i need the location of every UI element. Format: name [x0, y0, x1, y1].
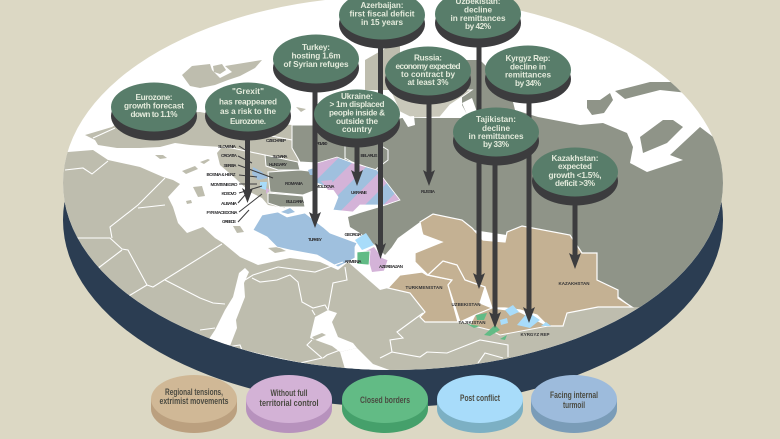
map labels: FYR MACEDONIA [206, 210, 238, 215]
land: Scandinavia [182, 60, 262, 88]
callout: Azerbaijan: in 15 years [361, 18, 403, 27]
disc top [63, 0, 723, 370]
arrow: Kyrgyz Rep [523, 95, 535, 323]
map labels: ROMANIA [285, 181, 304, 186]
land: Turkey [253, 212, 357, 267]
map labels: GEORGIA [344, 232, 362, 237]
legend: without full territorial control [246, 375, 332, 433]
land: islands [155, 64, 306, 253]
map labels: KYRGYZ REP [520, 332, 550, 337]
legend: without full territorial control: Without full [270, 388, 308, 399]
map labels: AZERBAIJAN [379, 264, 403, 269]
land: Kazakhstan [415, 214, 632, 326]
land: Azerbaijan [366, 247, 388, 272]
legend: regional tensions: Regional tensions, [165, 387, 223, 398]
land: Russia north tips [462, 60, 538, 120]
callout: Ukraine: people inside & [329, 108, 385, 118]
callout: Tajikistan [453, 108, 539, 166]
callout: Eurozone: down to 1.1% [130, 110, 178, 119]
arrows [242, 40, 581, 328]
map labels [206, 138, 590, 337]
callout: Ukraine: > 1m displaced [330, 100, 384, 109]
arrow: Azerbaijan [375, 45, 386, 259]
land: white gaps north [402, 98, 477, 127]
map labels: TAJIKISTAN [458, 320, 486, 325]
arrow: Ukraine [351, 135, 363, 186]
map labels: RUSSIA [421, 189, 436, 194]
callout: Azerbaijan: Azerbaijan: [360, 1, 404, 10]
callout: Turkey: hosting 1.6m [292, 52, 340, 60]
sea: Red Sea [207, 268, 249, 346]
arrow: Tajikistan [489, 160, 501, 328]
map labels: KAZAKHSTAN [558, 281, 590, 286]
legend: post conflict [437, 375, 523, 433]
land: Balkan detail [252, 167, 268, 180]
land: Russian islands [587, 82, 688, 153]
callout: Kyrgyz Rep: remittances [505, 71, 551, 80]
callout: Kazakhstan: Kazakhstan: [552, 154, 598, 163]
callout: Turkey: of Syrian refuges [284, 60, 349, 69]
legend: facing internal turmoil [531, 375, 617, 433]
callout: Ukraine: outside the [336, 117, 378, 126]
callout: Ukraine [314, 90, 400, 148]
callout: Grexit: Eurozone. [230, 117, 266, 126]
callout: Tajikistan: decline [482, 124, 510, 133]
callout: Kazakhstan: growth <1.5%, [548, 171, 602, 180]
arrow: Eurozone Grexit [242, 130, 253, 203]
map labels: UZBEKISTAN [452, 302, 480, 307]
land: Russia [340, 117, 730, 310]
land: Georgia [355, 233, 374, 250]
land: Moldova [321, 180, 334, 190]
callout: Uzbekistan: by 42% [465, 22, 492, 31]
legend: post conflict: Post conflict [460, 393, 501, 404]
callout: Russia [385, 46, 471, 104]
callout: Russia: at least 3% [408, 78, 449, 87]
arrow: Kazakhstan [569, 195, 581, 269]
callout: Uzbekistan [435, 0, 521, 48]
arrow: Turkey [309, 80, 321, 228]
land: south [63, 150, 641, 370]
map labels: BOSNIA & HERZ [206, 172, 236, 177]
land: western and central Europe [85, 112, 300, 208]
map labels: TURKEY [308, 237, 322, 242]
callout: Ukraine: country [342, 125, 372, 134]
map labels: TURKMENISTAN [406, 285, 442, 290]
callout: Grexit [205, 82, 291, 140]
map labels: BULGARIA [286, 199, 305, 204]
callout: Kazakhstan: expected [558, 162, 592, 171]
callout: Kyrgyz Rep: by 34% [515, 79, 542, 88]
callout: Tajikistan: by 33% [483, 140, 510, 149]
legend: facing internal turmoil: turmoil [563, 400, 585, 411]
callout: Eurozone [111, 82, 197, 140]
map labels: SLOVENIA [218, 144, 237, 149]
callout: Kyrgyz Rep: decline in [510, 62, 546, 72]
map labels: MONTENEGRO [210, 182, 238, 187]
callout: Kyrgyz Rep [485, 46, 571, 104]
callout: Tajikistan: Tajikistan: [476, 115, 516, 124]
legend: regional tensions: extrimist movements [160, 396, 228, 407]
map labels: SERBIA [224, 163, 237, 168]
legend [151, 375, 617, 433]
land: light north area [390, 90, 472, 118]
map labels: CZECH REP [266, 138, 286, 143]
land: eastern Balkans [268, 170, 312, 194]
map [63, 46, 723, 370]
land: northern Europe [365, 46, 400, 90]
land: Uzbekistan [428, 261, 492, 322]
callout: Uzbekistan: decline [464, 6, 492, 15]
map labels: CROATIA [221, 153, 238, 158]
arrow: Russia [423, 95, 435, 186]
callout: Eurozone: growth forecast [124, 102, 184, 110]
callout: Ukraine: Ukraine: [341, 92, 373, 101]
land: Tajik and Kyrgyz [470, 308, 548, 335]
map labels: ARMENIA [344, 259, 362, 264]
callout: Grexit: has reappeared [219, 98, 277, 106]
sea: Persian Gulf [310, 310, 357, 352]
callout: Grexit: "Grexit" [232, 87, 264, 96]
callout: Turkey: Turkey: [302, 43, 330, 52]
callout: Grexit: as a risk to the [220, 107, 276, 116]
callout: Kazakhstan: deficit >3% [555, 179, 596, 188]
map labels: MOLDOVA [316, 184, 335, 189]
land: Qatar [312, 333, 326, 340]
sea: Arabian Sea [340, 348, 390, 370]
callout: Russia: economy expected [396, 62, 460, 71]
callout: Kyrgyz Rep: Kyrgyz Rep: [506, 54, 550, 63]
sea: Caspian [384, 238, 398, 271]
callout: Kazakhstan [532, 148, 618, 206]
callout: Russia: Russia: [414, 54, 442, 62]
disc base [63, 33, 723, 407]
legend: regional tensions [151, 375, 237, 433]
Balkan leader lines [238, 146, 273, 222]
map labels: BELARUS [360, 153, 378, 158]
map labels: SLOVAKIA [272, 154, 288, 159]
land: Turkmenistan [388, 272, 458, 322]
borders [65, 128, 508, 363]
callout: Azerbaijan: first fiscal deficit [350, 10, 415, 18]
legend: closed borders [342, 375, 428, 433]
map labels: POLAND [316, 141, 328, 146]
legend: closed borders: Closed borders [360, 395, 410, 406]
callout: Eurozone: Eurozone: [136, 93, 172, 102]
callout: Tajikistan: in remittances [468, 132, 524, 141]
arrow: Uzbekistan [473, 40, 485, 289]
map labels: UKRAINE [351, 190, 367, 195]
callout: Azerbaijan [339, 0, 425, 48]
map labels: GREECE [222, 219, 236, 224]
map labels: HUNGARY [269, 162, 287, 167]
legend: facing internal turmoil: Facing internal [550, 390, 598, 401]
legend: without full territorial control: territorial control [260, 398, 318, 409]
land: Ukraine hatched [317, 157, 400, 212]
callout: Turkey [273, 34, 359, 92]
callout: Russia: to contract by [401, 70, 455, 79]
land: Armenia [357, 251, 370, 265]
map labels: ALBANIA [221, 201, 238, 206]
map labels: KOSOVO [222, 191, 237, 196]
callout: Uzbekistan: in remittances [450, 14, 506, 23]
